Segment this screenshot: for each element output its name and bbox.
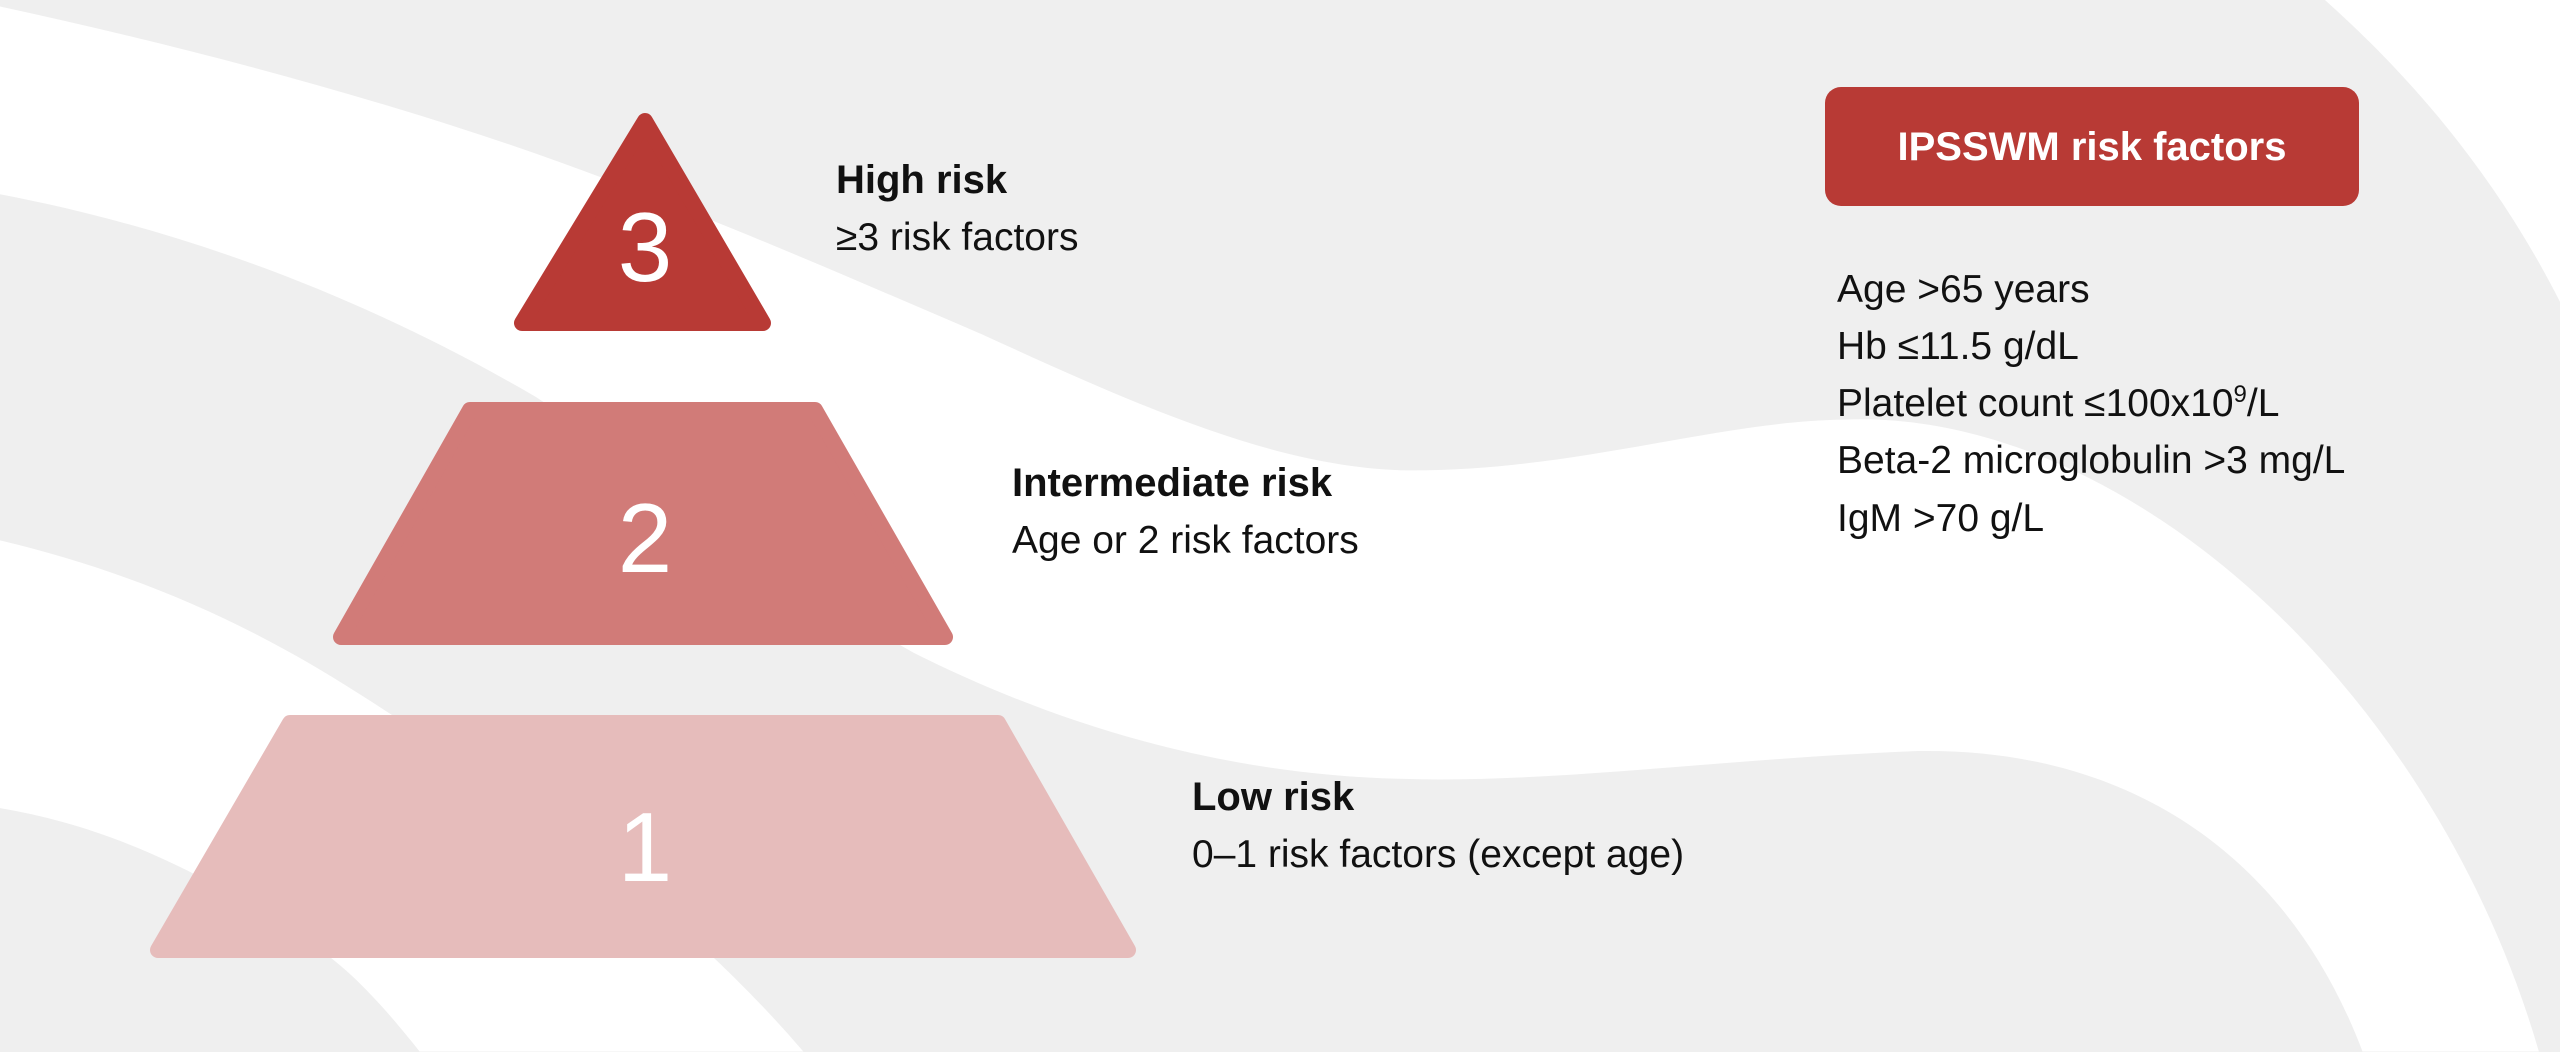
label: high risk: High risk	[836, 158, 1008, 202]
label: intermediate risk	[1012, 461, 1359, 562]
pyramid level 3: high risk	[522, 121, 763, 323]
risk factor list: Beta-2 microglobulin >3 mg/L	[1837, 439, 2345, 482]
risk factor list: Hb ≤11.5 g/dL	[1837, 325, 2079, 368]
risk factor list: Platelet count ≤100x10	[1837, 382, 2234, 425]
risk factor list: 9	[2234, 381, 2247, 408]
label: intermediate risk: Age or 2 risk factors	[1012, 519, 1359, 562]
label: low risk: Low risk	[1192, 775, 1355, 819]
risk factor list	[1837, 268, 2345, 540]
heading box: IPSSWM risk factors	[1825, 87, 2359, 206]
pyramid level 2: intermediate risk	[341, 410, 945, 637]
label: high risk	[836, 158, 1078, 259]
label: intermediate risk: Intermediate risk	[1012, 461, 1333, 505]
pyramid level 1: low risk	[158, 723, 1128, 950]
label: low risk: 0–1 risk factors (except age)	[1192, 833, 1684, 876]
heading box: IPSSWM risk factors: IPSSWM risk factors	[1897, 125, 2287, 169]
risk factor list: IgM >70 g/L	[1837, 497, 2044, 540]
pyramid level 1: low risk: 1	[618, 792, 672, 902]
risk factor list: /L	[2247, 382, 2279, 425]
label: high risk: ≥3 risk factors	[836, 216, 1078, 259]
pyramid level 2: intermediate risk: 2	[618, 483, 672, 593]
pyramid level 3: high risk: 3	[618, 192, 672, 302]
label: low risk	[1192, 775, 1684, 876]
risk factor list: Age >65 years	[1837, 268, 2090, 311]
